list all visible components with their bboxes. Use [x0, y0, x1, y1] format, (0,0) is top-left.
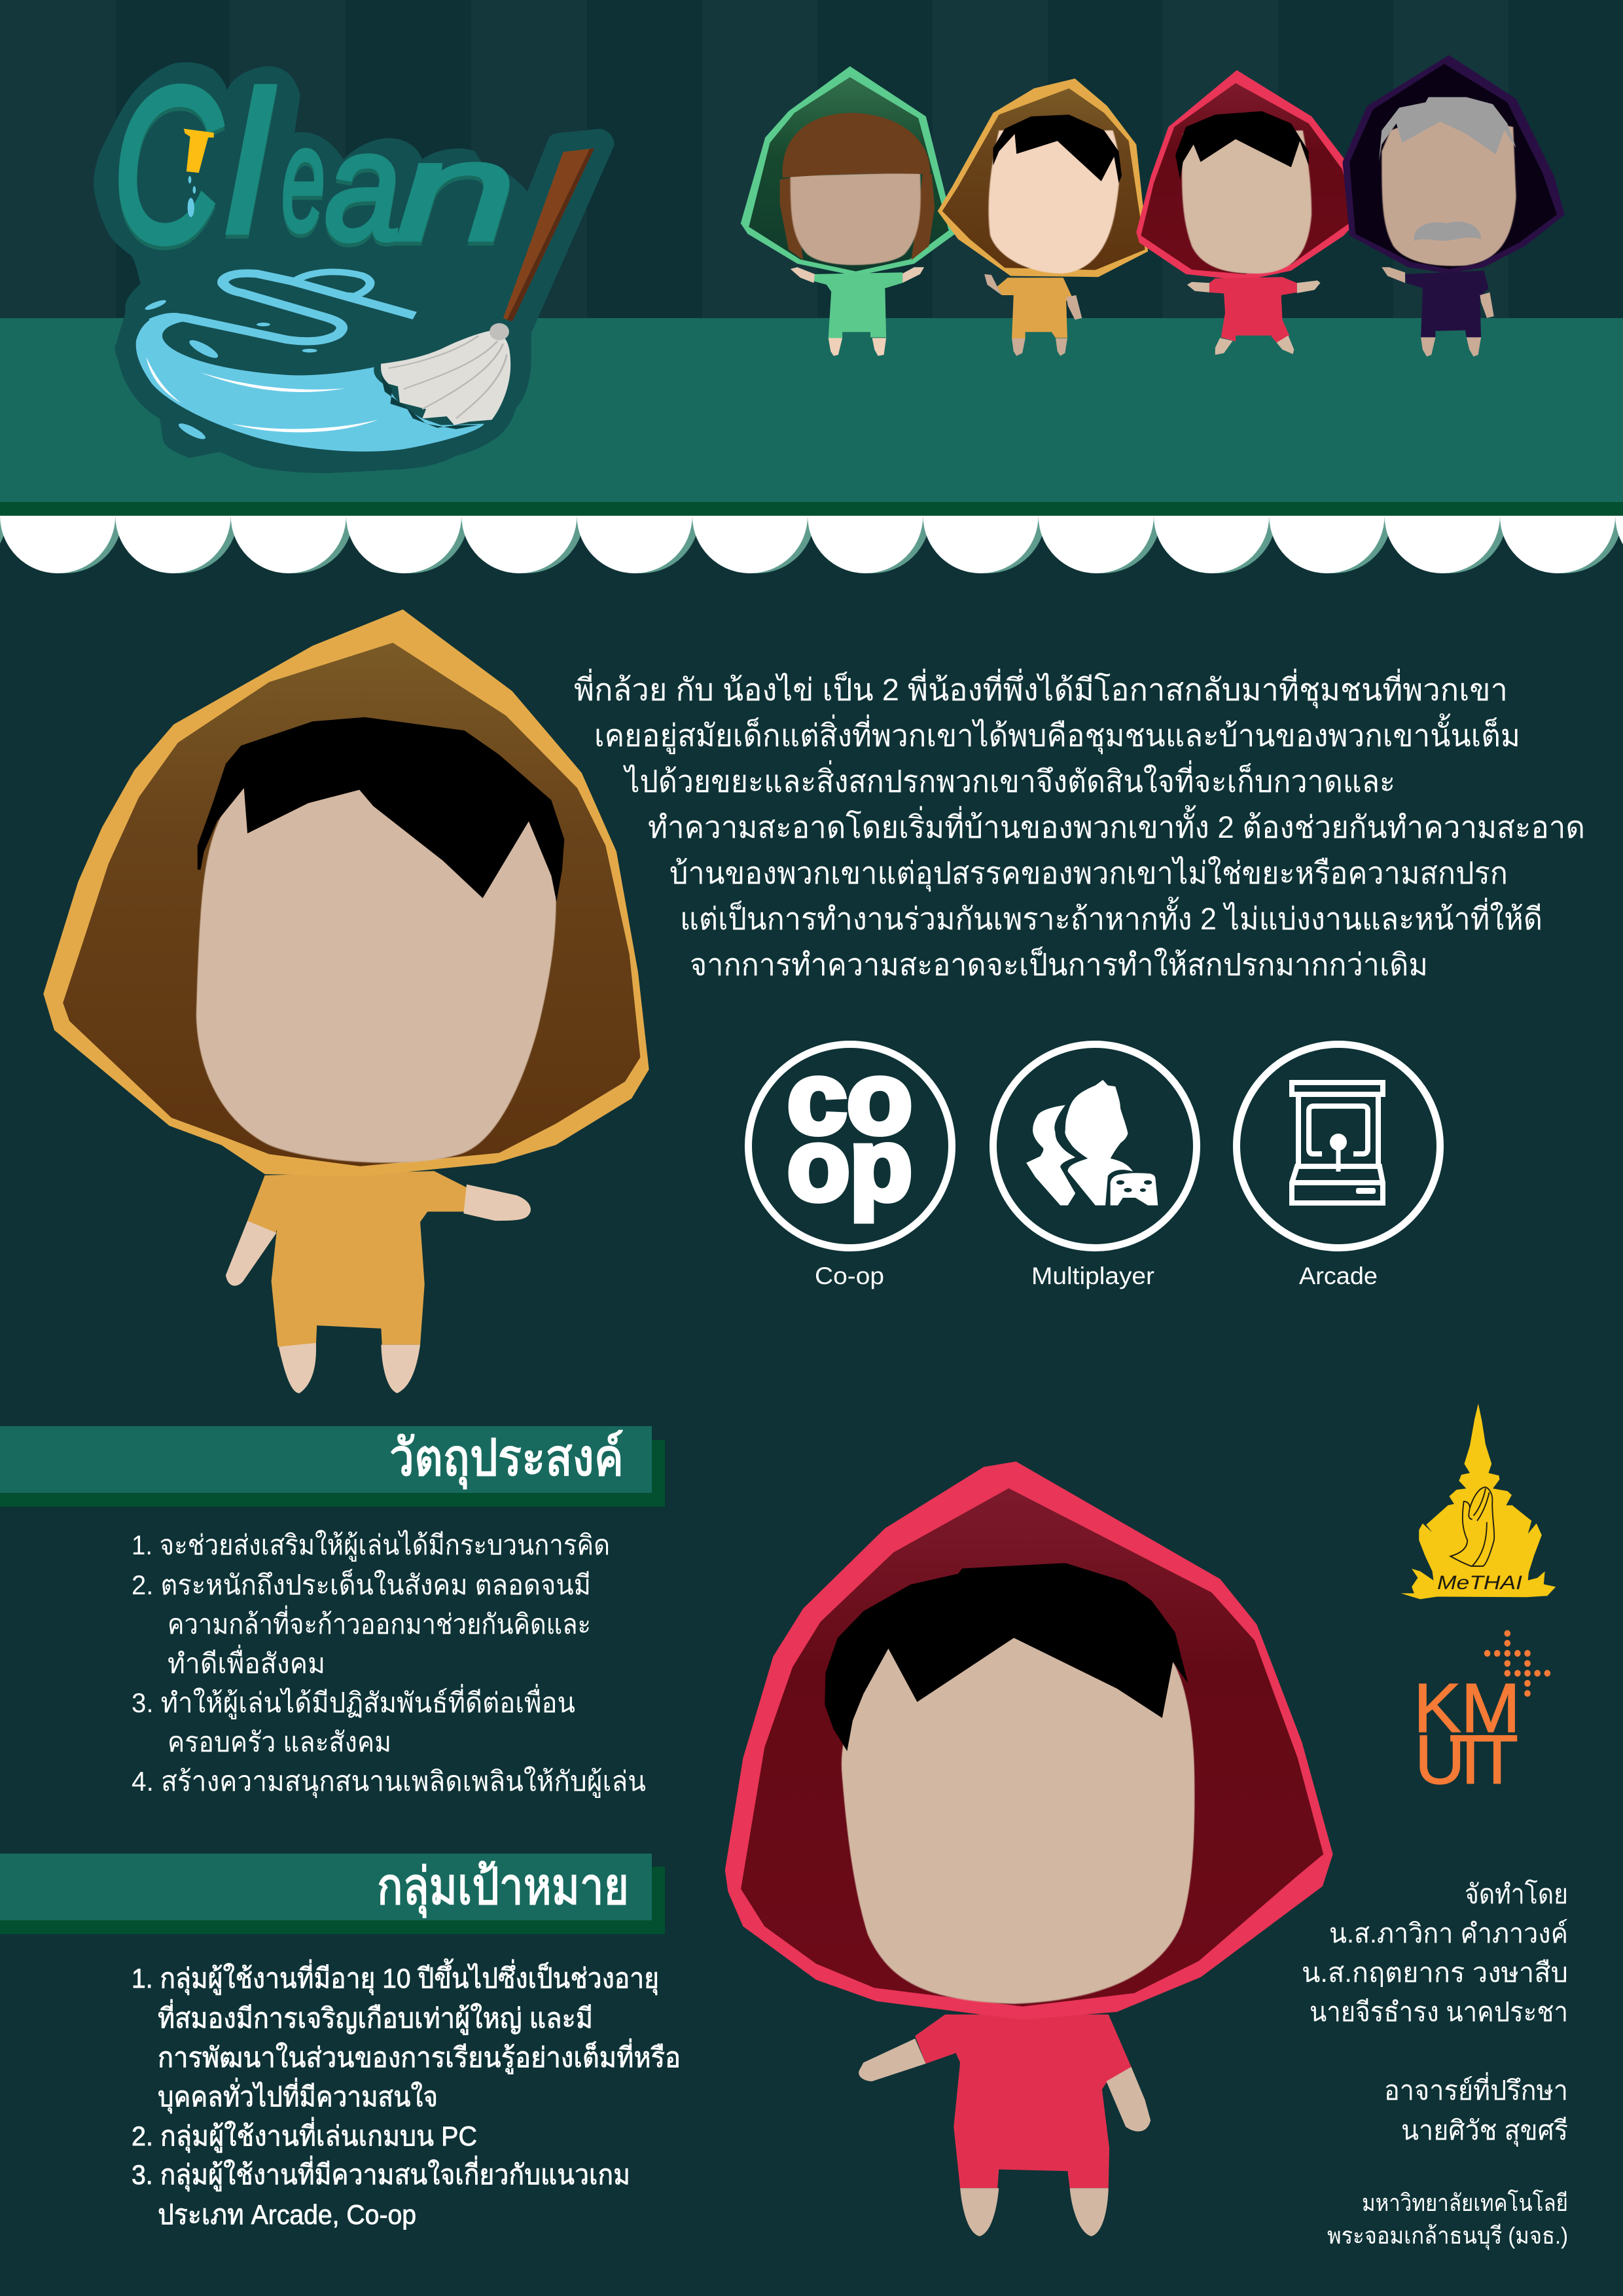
character: yellow hood small	[938, 79, 1148, 356]
character: red hood small	[1136, 70, 1359, 355]
header green band	[0, 318, 1623, 503]
label: co-op: Co-op	[815, 1263, 884, 1289]
story paragraph: พี่กล้วย กับ น้องไข่ เป็น 2 พี่น้องที่พึ่งได้มีโอกาสกลับมาที่ชุมชนที่พวกเขา	[574, 668, 1508, 709]
target group list: ที่สมองมีการเจริญเกือบเท่าผู้ใหญ่ และมี	[158, 2000, 593, 2035]
logo: MeTHAI	[1400, 1404, 1556, 1599]
icon: co-op badge: co	[787, 1041, 912, 1155]
label: arcade: Arcade	[1299, 1263, 1378, 1289]
credits block: นายศิวัช สุขศรี	[1401, 2115, 1568, 2147]
icon: co-op badge: op	[787, 1108, 912, 1221]
objectives list: ความกล้าที่จะก้าวออกมาช่วยกันคิดและ	[168, 1605, 591, 1640]
logo: Clean with mop: l	[226, 52, 275, 275]
header striped backdrop	[0, 0, 1623, 318]
character: large yellow hood	[43, 609, 649, 1393]
target group list: บุคคลทั่วไปที่มีความสนใจ	[158, 2078, 438, 2114]
credits block: พระจอมเกล้าธนบุรี (มจธ.)	[1327, 2222, 1568, 2250]
logo: Clean with mop: n	[396, 117, 516, 274]
credits block: นายจีรธำรง นาคประชา	[1310, 1997, 1568, 2027]
logo: Clean with mop: C	[113, 46, 223, 292]
story paragraph: เคยอยู่สมัยเด็กแต่สิ่งที่พวกเขาได้พบคือชุมชนและบ้านของพวกเขานั้นเต็ม	[594, 713, 1520, 755]
target group list: 3. กลุ่มผู้ใช้งานที่มีความสนใจเกี่ยวกับแนวเกม	[132, 2156, 630, 2192]
awning scallops	[0, 502, 1623, 573]
story paragraph: บ้านของพวกเขาแต่อุปสรรคของพวกเขาไม่ใช่ขยะหรือความสกปรก	[669, 855, 1508, 892]
heading bar: target group	[0, 1854, 665, 1934]
logo: Clean with mop: a	[325, 99, 401, 273]
heading bar: target group: กลุ่มเป้าหมาย	[377, 1857, 629, 1918]
icon: arcade badge	[1237, 1045, 1440, 1247]
story paragraph: ไปด้วยขยะและสิ่งสกปรกพวกเขาจึงตัดสินใจที่จะเก็บกวาดและ	[622, 760, 1395, 798]
logo: KMUTT	[1414, 1630, 1550, 1799]
objectives list: ทำดีเพื่อสังคม	[168, 1645, 325, 1679]
target group list: 1. กลุ่มผู้ใช้งานที่มีอายุ 10 ปีขึ้นไปซึ่งเป็นช่วงอายุ	[132, 1958, 659, 1996]
story paragraph	[574, 668, 1585, 982]
logo: Clean with mop: C	[113, 42, 223, 288]
credits block: มหาวิทยาลัยเทคโนโลยี	[1362, 2189, 1568, 2216]
credits block: น.ส.กฤตยากร วงษาสืบ	[1302, 1958, 1568, 1988]
logo: Clean with mop: l	[226, 56, 275, 279]
target group list: 2. กลุ่มผู้ใช้งานที่เล่นเกมบน PC	[132, 2117, 477, 2153]
logo: Clean with mop: e	[281, 99, 325, 266]
objectives list: 2. ตระหนักถึงประเด็นในสังคม ตลอดจนมี	[132, 1569, 591, 1600]
logo: Clean with mop: n	[396, 113, 516, 270]
target group list: การพัฒนาในส่วนของการเรียนรู้อย่างเต็มที่หรือ	[158, 2039, 681, 2074]
objectives list: 1. จะช่วยส่งเสริมให้ผู้เล่นได้มีกระบวนการคิด	[132, 1530, 610, 1562]
character: green hood girl	[741, 66, 955, 356]
credits block: อาจารย์ที่ปรึกษา	[1384, 2072, 1568, 2106]
heading bar: objectives	[0, 1426, 665, 1507]
objectives list: 3. ทำให้ผู้เล่นได้มีปฏิสัมพันธ์ที่ดีต่อเพื่อน	[132, 1684, 575, 1719]
logo: MeTHAI: MeTHAI	[1437, 1572, 1522, 1594]
target group list	[132, 1958, 681, 2230]
logo: Clean with mop	[94, 42, 615, 473]
heading bar: objectives: วัตถุประสงค์	[389, 1429, 624, 1489]
icon: multiplayer badge	[993, 1045, 1196, 1247]
credits block: น.ส.ภาวิกา คำภาวงค์	[1329, 1918, 1568, 1948]
icon: co-op badge	[749, 1041, 952, 1247]
logo: KMUTT: UTT	[1415, 1721, 1518, 1799]
logo: KMUTT: KM	[1414, 1670, 1520, 1747]
objectives list	[132, 1530, 646, 1799]
credits block: จัดทำโดย	[1465, 1879, 1568, 1909]
story paragraph: แต่เป็นการทำงานร่วมกันเพราะถ้าหากทั้ง 2 ไม่แบ่งงานและหน้าที่ให้ดี	[680, 897, 1543, 936]
target group list: ประเภท Arcade, Co-op	[158, 2199, 416, 2230]
credits block	[1302, 1879, 1568, 2250]
label: multiplayer: Multiplayer	[1031, 1263, 1154, 1289]
character: purple hood elder	[1342, 55, 1565, 357]
story paragraph: ทำความสะอาดโดยเริ่มที่บ้านของพวกเขาทั้ง 2 ต้องช่วยกันทำความสะอาด	[648, 805, 1585, 844]
story paragraph: จากการทำความสะอาดจะเป็นการทำให้สกปรกมากกว่าเดิม	[690, 946, 1428, 982]
objectives list: ครอบครัว และสังคม	[168, 1727, 391, 1757]
logo: Clean with mop: e	[281, 96, 325, 262]
logo: Clean with mop: a	[325, 103, 401, 277]
character: large red hood	[725, 1462, 1333, 2236]
objectives list: 4. สร้างความสนุกสนานเพลิดเพลินให้กับผู้เล่น	[132, 1766, 646, 1799]
